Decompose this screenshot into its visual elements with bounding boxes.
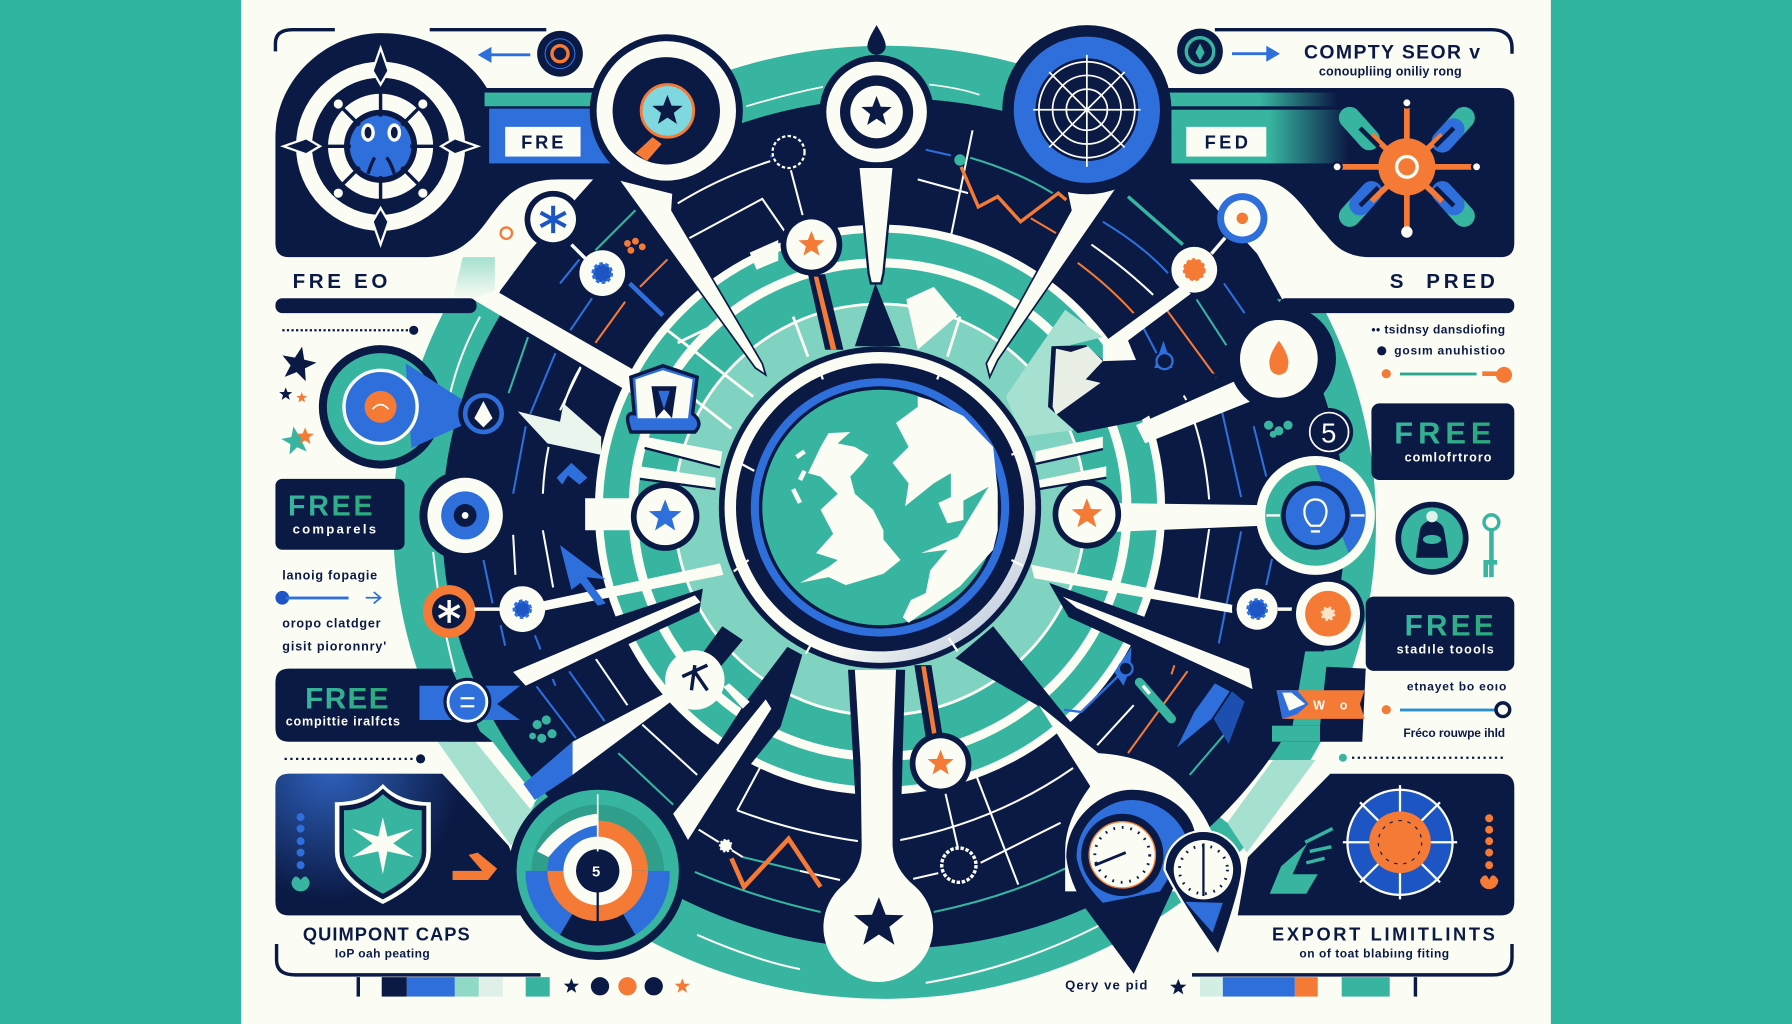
heading: quimpont caps: QUIMPONT CAPS (303, 924, 470, 945)
top left frame line (275, 30, 546, 51)
panel: FREE left upper: comparels (293, 522, 376, 537)
bar right (1279, 298, 1514, 313)
arrow: blue pointer small (557, 463, 587, 485)
colour swatches right (1200, 977, 1417, 997)
spoke: lower left wedge with outline (509, 589, 703, 691)
icon: navy star (278, 343, 319, 383)
teal band under flag (1272, 726, 1320, 742)
label box FED: FED (1205, 132, 1248, 153)
small badge top left (537, 31, 583, 77)
icon: blue ring drop (1217, 193, 1267, 243)
donut chart (509, 782, 687, 960)
legend marks left (564, 977, 690, 995)
spoke: blue and white tool band (523, 683, 750, 800)
subheading: top right: conoupliing oniliy rong (1319, 64, 1462, 78)
link left lower (474, 608, 503, 611)
star pin: upper orange (781, 214, 843, 350)
slider right upper (1382, 367, 1512, 383)
bar left (275, 298, 477, 313)
page sheet (241, 0, 1551, 1024)
slider left (275, 591, 381, 605)
pin: left blue target (319, 345, 509, 469)
text: left note 2: oropo clatdger (282, 616, 381, 630)
spoke: drop pin stem (1136, 375, 1269, 443)
spoke: magnifier stem (618, 179, 766, 375)
icon: person badge (1395, 502, 1469, 575)
icon: asterisk circle (525, 191, 582, 248)
clock pin small (1165, 831, 1242, 955)
link right lower (1278, 608, 1297, 611)
target pin top (819, 25, 934, 283)
label: S PRED: S PRED (1390, 270, 1495, 293)
teal connector (1293, 651, 1328, 726)
icon: legend star (1170, 979, 1186, 994)
icon: orange splat circle (1171, 247, 1217, 293)
inner teal annulus (518, 229, 1161, 840)
text: right note 3: etnayet bo eoıo (1407, 679, 1506, 693)
icon: sun wheel (1343, 785, 1457, 899)
heading: top right: COMPTY SEOR v (1304, 41, 1480, 63)
text: left note 3: gisit pioronnry' (282, 639, 386, 653)
icon: small marker (1154, 341, 1173, 369)
big star pin bottom (823, 670, 933, 982)
icon: tiny navy star (279, 387, 292, 400)
icon: chevron leaf (1270, 829, 1333, 894)
link between circles (571, 245, 585, 258)
orange dots (1480, 814, 1498, 889)
map: Britain (800, 432, 901, 585)
panel: FREE right lower: FREE (1405, 609, 1494, 642)
small badge top right (1177, 29, 1223, 74)
icon: blue splat left (499, 586, 545, 632)
spoke: link to splat (1103, 285, 1191, 361)
teal blob (291, 876, 310, 891)
number 5 badge (1305, 408, 1353, 456)
flag ribbon (1277, 690, 1365, 719)
icon: left target circle (419, 470, 511, 561)
star pin: left blue (631, 482, 699, 551)
shield badge on spoke (628, 366, 699, 432)
flag ribbon: Wo (1313, 699, 1348, 713)
spoke: right star stem (1097, 503, 1263, 533)
label: FRE EO: FRE EO (293, 270, 387, 293)
spoke: web stem (986, 182, 1121, 377)
spoke: left star rectangle (585, 498, 640, 530)
icon: orange badge (1291, 577, 1365, 650)
icon: blue splat circle right (1232, 584, 1282, 634)
panel: FREE right upper (1371, 403, 1514, 480)
bottom right frame line (1192, 944, 1512, 975)
panel: top left (275, 33, 640, 257)
label box FED (1186, 127, 1266, 157)
cream fan in annulus (906, 287, 958, 350)
map: small isles (793, 451, 805, 503)
heading: export limits: EXPORT LIMITLINTS (1272, 924, 1495, 945)
panel: FREE left lower: compittie iralfcts (286, 715, 400, 729)
clock pin large (1066, 790, 1195, 974)
link right top (1211, 238, 1225, 254)
text: left note 1: lanoig fopagie (282, 568, 377, 582)
text: right note 1: •• tsidnsy dansdiofing (1371, 323, 1505, 337)
drop pin (1229, 305, 1336, 413)
arrow: right navy cursor (1048, 345, 1219, 433)
label box FRE: FRE (521, 132, 563, 153)
panel: FREE right upper: comlofrtroro (1405, 451, 1492, 465)
panel: quimpont caps (275, 774, 537, 915)
central map dial (719, 346, 1041, 669)
orange trend line bottom (731, 839, 821, 887)
blue dots (297, 813, 305, 869)
dotted divider right (1339, 754, 1505, 762)
spoke: thin left line (522, 563, 723, 615)
dotted divider left bottom (285, 754, 425, 763)
web pin (1002, 25, 1171, 194)
icon: blue splat circle (579, 250, 625, 296)
panel: FREE left lower (275, 669, 493, 742)
slider right lower (1382, 703, 1510, 717)
gear ring top (773, 136, 805, 168)
icon: tiny orange star (296, 392, 307, 402)
icon: magnifier (635, 85, 694, 161)
map: continent (893, 397, 998, 623)
panel: FREE right lower: stadıle toools (1397, 643, 1494, 657)
text: right note 2: gosım anuhistioo (1394, 343, 1505, 357)
arrow: blue right (1232, 46, 1280, 62)
virus network icon (1333, 98, 1481, 238)
panel: FREE left lower: FREE (305, 683, 389, 716)
spoke: left band to shield (473, 290, 642, 393)
ribbon with badge (419, 678, 520, 726)
icon: orange ring (501, 227, 512, 239)
bottom left frame line (277, 944, 541, 975)
star pin: right orange (1053, 480, 1121, 549)
arrow: blue pointer big (560, 545, 606, 606)
subheading: export limits: on of toat blabiıng fiting (1299, 947, 1449, 961)
magnifier pin (590, 34, 743, 187)
spoke: clock bubble (1039, 705, 1217, 891)
panel: FREE left upper (275, 479, 405, 550)
icon: web (1033, 55, 1141, 167)
colour swatches left (357, 977, 550, 997)
number 5 badge: 5 (1321, 417, 1336, 448)
star pin: lower orange (910, 665, 971, 794)
gear ring bottom right (942, 848, 976, 882)
orange trend line top (961, 167, 1066, 222)
icon: shield (335, 784, 431, 904)
dotted divider left top (282, 326, 418, 335)
icon: teal marks right (1264, 421, 1293, 438)
big teal target pin right (1256, 456, 1375, 575)
ray bars left and right (640, 437, 1106, 489)
panel: FREE right lower (1366, 597, 1514, 671)
icon: orange asterisk badge (423, 585, 475, 638)
spoke: lower right thin (1031, 565, 1237, 614)
spoke: lower right wide (1049, 583, 1257, 703)
central radar disc (393, 46, 1383, 999)
panel: export limits (1238, 774, 1514, 915)
panel: top right (1131, 88, 1514, 257)
text: right note 4: Fréco rouwpe ihld (1403, 726, 1505, 740)
icon: teal orange star (280, 424, 314, 455)
teal node on trend (954, 154, 966, 166)
icon: orange marks (624, 238, 646, 254)
caption: query: Qery ve pid (1065, 978, 1147, 993)
icon: tool circle (665, 650, 725, 710)
blue kites and tool (1064, 647, 1245, 747)
top right frame line (1215, 30, 1512, 54)
panel: FREE left upper: FREE (288, 490, 373, 522)
compass icon (283, 48, 478, 245)
icon: teal clover (529, 715, 557, 743)
arrow: orange (453, 853, 497, 880)
donut chart: 5 (592, 865, 600, 881)
subheading: quimpont caps: IoP oah peating (335, 947, 430, 961)
icon: key (1484, 515, 1499, 577)
label box FRE (505, 127, 581, 157)
spoke: lower centre wedge (673, 699, 771, 840)
gear ring bottom left (719, 839, 733, 853)
arrow: blue left (478, 47, 530, 63)
panel: FREE right upper: FREE (1394, 415, 1491, 450)
navy disc lines (433, 130, 1272, 983)
